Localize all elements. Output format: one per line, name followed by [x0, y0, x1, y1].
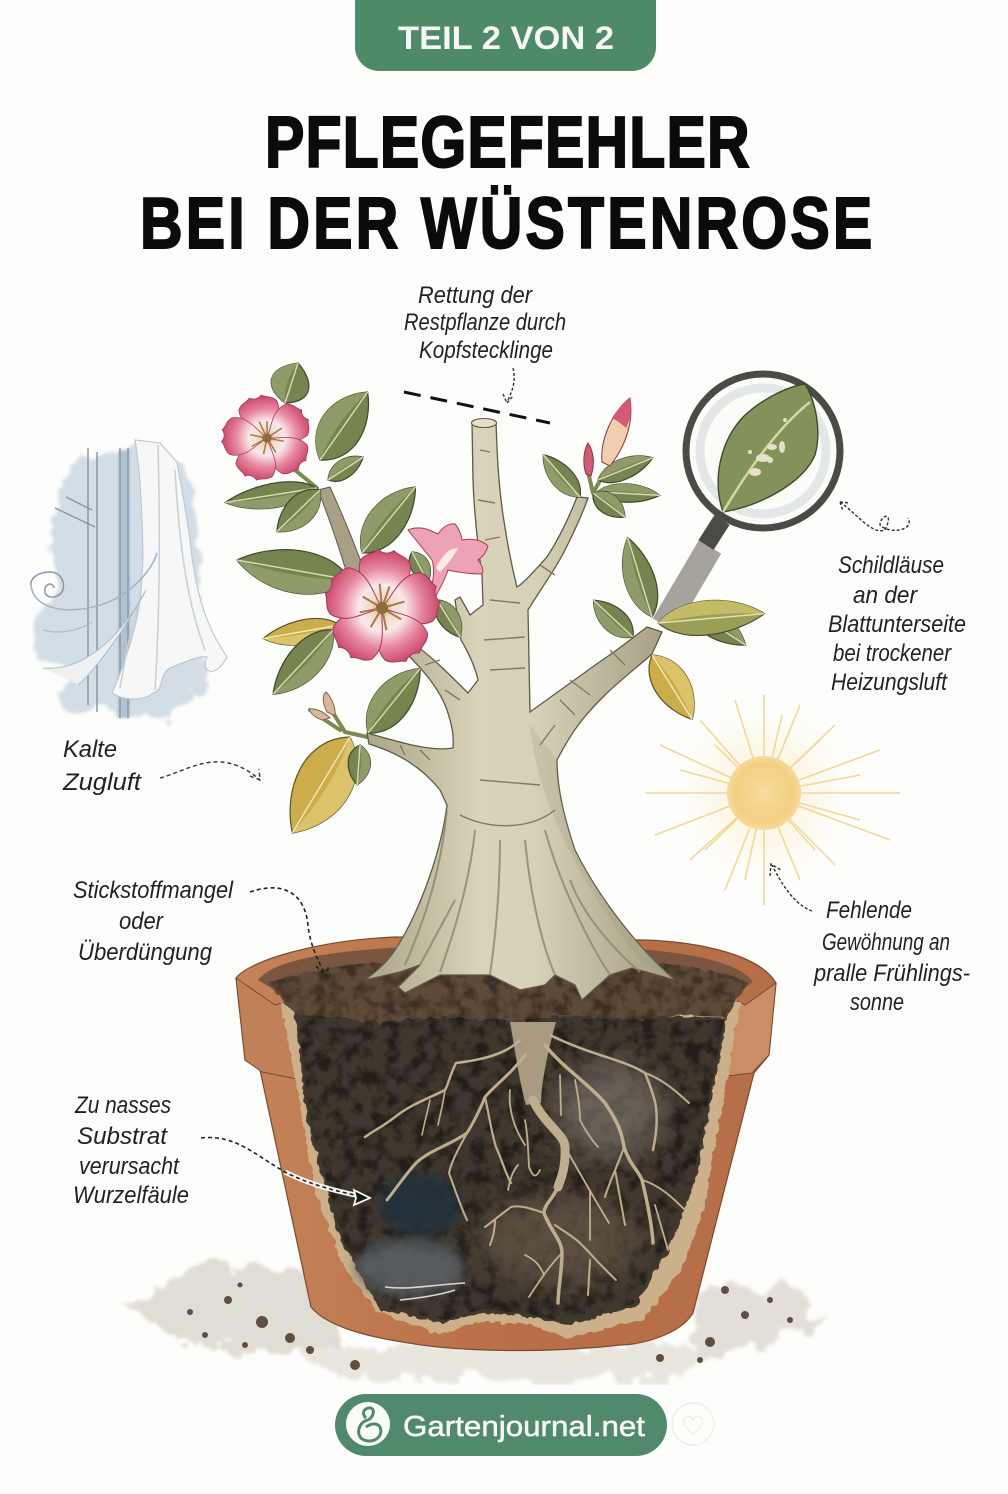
trunk and branches — [365, 422, 675, 1000]
footer brand pill: Gartenjournal.net — [403, 1411, 645, 1443]
label: Stickstoffmangel: Stickstoffmangel — [73, 877, 234, 904]
right cut rim face — [727, 983, 776, 1076]
glass inner ring — [700, 388, 826, 514]
label: Schildläuse — [828, 552, 966, 696]
tap root crown — [510, 1022, 556, 1105]
large bud tip — [612, 398, 631, 428]
label: Kalte Zugluft: Kalte — [63, 736, 117, 763]
label: Stickstoffmangel: Überdüngung — [78, 939, 213, 966]
label: Fehlende Gewöhnung: Fehlende — [826, 897, 912, 924]
title: PFLEGEFEHLER — [265, 101, 750, 182]
label: Kalte Zugluft: Zugluft — [62, 769, 142, 796]
label: Fehlende Gewöhnung: sonne — [850, 989, 904, 1016]
magnified leaf — [718, 384, 818, 512]
illustration: terracotta pot with root cross section — [236, 937, 776, 1351]
label: Zu nasses Substrat — [73, 1092, 189, 1209]
trunk dark side — [530, 725, 675, 980]
label: Fehlende Gewöhnung — [813, 897, 970, 1016]
flower: large open bloom — [315, 546, 449, 674]
lower left buds — [309, 692, 335, 720]
label: Stickstoffmangel: oder — [119, 908, 164, 935]
cut top — [472, 418, 496, 428]
flower: top left — [208, 384, 327, 494]
magnifying glass with scale insect leaf — [664, 374, 840, 625]
large flower bud — [602, 398, 631, 466]
label: Schildläuse: bei trockener — [833, 640, 952, 667]
label: Schildläuse: an der — [853, 582, 918, 609]
upper left branch — [318, 487, 412, 655]
cut line — [404, 392, 550, 423]
illustration: desert rose plant — [208, 357, 766, 1000]
label: Schildläuse: Heizungsluft — [831, 669, 948, 696]
handle — [664, 547, 710, 625]
illustration: curtain at window — [31, 440, 227, 718]
footer brand pill — [335, 1394, 667, 1456]
cut edge of pot wall — [280, 1003, 740, 1338]
label: Stickstoffmangel — [73, 877, 234, 966]
leaves — [223, 357, 766, 848]
label: Kalte Zugluft — [62, 736, 142, 796]
label: Schildläuse: Schildläuse — [838, 552, 944, 579]
label: Rettung: Restpflanze durch — [404, 309, 566, 336]
flower: trumpet side view — [408, 524, 488, 603]
pot body — [236, 937, 776, 1351]
label: Zu nasses Substrat: Zu nasses — [74, 1092, 171, 1119]
arrow: to root rot — [201, 1138, 370, 1205]
lower soil haze — [480, 1195, 640, 1285]
label: Zu nasses Substrat: Substrat — [77, 1123, 168, 1150]
arrow: to magnifier — [840, 502, 909, 531]
arrow: to soil surface — [250, 888, 329, 977]
dark soil — [295, 1013, 727, 1325]
label: Rettung — [404, 282, 566, 364]
root flare shading — [405, 810, 640, 975]
banner: part indicator — [355, 0, 656, 71]
title: BEI DER WÜSTENROSE — [140, 182, 872, 263]
scale insects — [748, 418, 787, 476]
label: Fehlende Gewöhnung: pralle Frühlings- — [813, 960, 970, 987]
illustration: sun — [645, 695, 900, 905]
banner: part indicator: TEIL 2 VON 2 — [398, 20, 614, 56]
arrow: to sun — [770, 864, 812, 911]
stem and twig of lower left — [295, 470, 606, 738]
bark shading — [400, 450, 625, 826]
icon: brand logo — [346, 1402, 390, 1446]
glass — [686, 374, 840, 528]
label: Rettung: Kopfstecklinge — [419, 337, 553, 364]
rim inner wall — [258, 945, 753, 1000]
lighter soil haze — [555, 1060, 665, 1160]
small flower bud — [584, 443, 593, 476]
title — [140, 101, 872, 263]
roots — [365, 1035, 689, 1303]
arrow: to cut line — [503, 368, 514, 403]
rot wash — [355, 1240, 465, 1296]
soil mottling — [298, 1016, 724, 1322]
leaf midrib — [723, 402, 810, 512]
faint heart badge — [672, 1403, 714, 1445]
collar — [706, 520, 722, 545]
label: Schildläuse: Blattunterseite — [828, 611, 966, 638]
label: Zu nasses Substrat: Wurzelfäule — [73, 1182, 189, 1209]
label: Fehlende Gewöhnung: Gewöhnung an — [822, 929, 950, 956]
soil surface texture — [267, 962, 747, 1022]
arrow: to yellow leaf — [160, 762, 260, 780]
left cut rim face — [236, 978, 297, 1079]
soil surface band — [267, 962, 747, 1022]
root rot patch — [380, 1173, 460, 1237]
ground wash with soil crumbs — [125, 1265, 825, 1378]
rot highlights — [385, 1283, 465, 1300]
label: Zu nasses Substrat: verursacht — [79, 1153, 180, 1180]
label: Rettung: Rettung der — [418, 282, 533, 309]
